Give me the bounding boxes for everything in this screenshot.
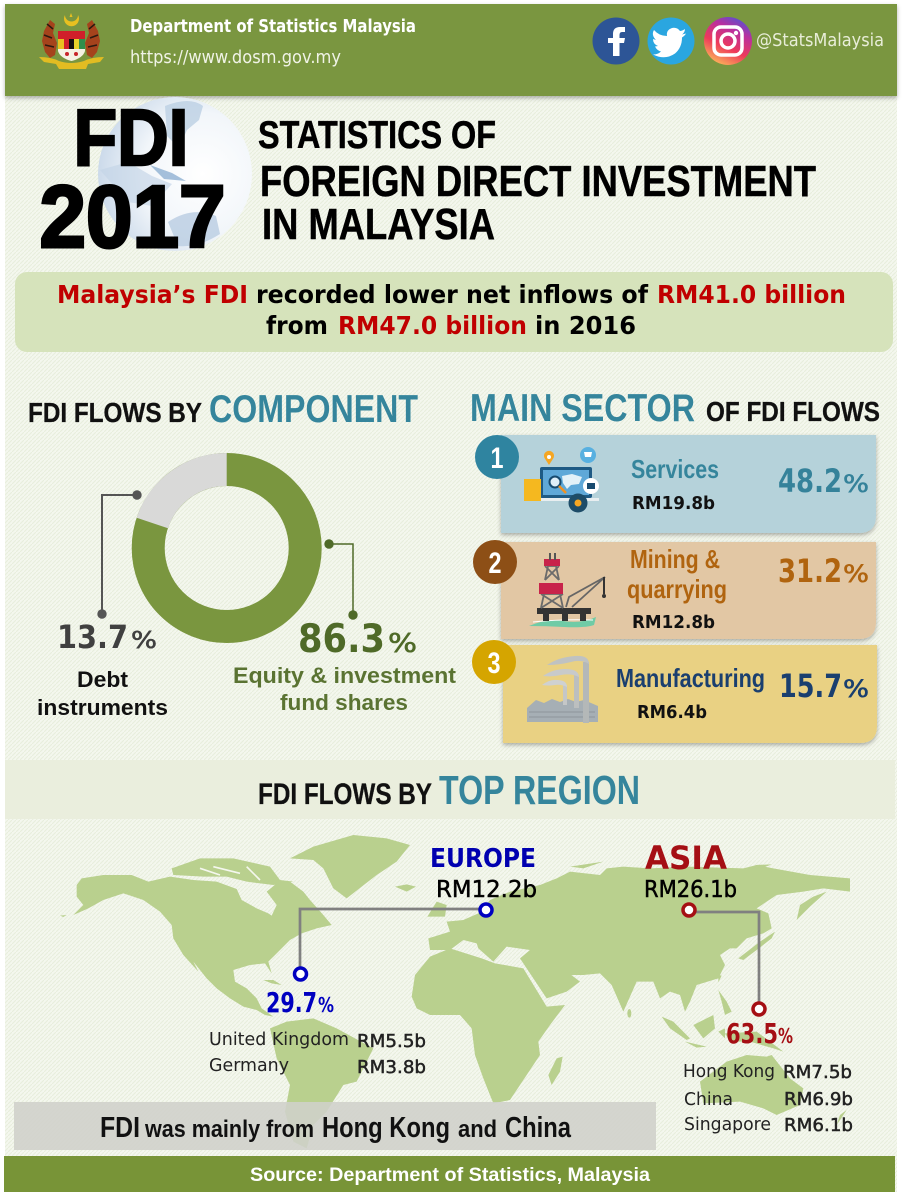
- leader line: debt: [102, 495, 137, 612]
- marker: Americas dot: [294, 968, 306, 980]
- heading band: top region: [5, 760, 895, 819]
- icon: factory: [527, 656, 598, 723]
- value: mining: RM12.8b: [632, 612, 715, 633]
- header department name: Department of Statistics Malaysia: [130, 16, 416, 37]
- icon: instagram: [704, 17, 752, 65]
- percent: services: %: [843, 470, 869, 498]
- debt label: Debt: [77, 667, 129, 692]
- rank badge 1: 1: [490, 442, 504, 475]
- connector: Asia: [694, 912, 759, 1003]
- equity label: Equity & investment: [233, 663, 457, 688]
- value: Europe: RM12.2b: [436, 877, 537, 903]
- icon: oil rig: [529, 553, 606, 627]
- list: Asia countries: RM6.1b: [784, 1115, 853, 1136]
- list: Europe countries: Germany: [209, 1055, 289, 1076]
- list: Asia countries: RM6.9b: [784, 1089, 853, 1110]
- heading band: top region: TOP REGION: [439, 767, 640, 813]
- list: Europe countries: [209, 1029, 426, 1078]
- percent: manufacturing: 15.7: [779, 667, 842, 705]
- debt percentage: 13.7: [57, 618, 128, 656]
- heading: main sector: [470, 387, 880, 430]
- title block: [40, 93, 816, 266]
- heading band: top region: FDI FLOWS BY: [258, 778, 432, 811]
- debt label: [37, 667, 168, 720]
- label: mining: quarrying: [627, 574, 727, 604]
- label: manufacturing: Manufacturing: [616, 663, 765, 693]
- footer: source: [4, 1156, 895, 1192]
- callout: FDI mainly from Hong Kong and China: was mainly from: [144, 1116, 314, 1143]
- card: services: [475, 435, 876, 533]
- title: statistics of: STATISTICS OF: [258, 114, 496, 157]
- callout: net inflows banner: RM47.0 billion: [338, 311, 527, 340]
- list: Asia countries: [683, 1061, 853, 1136]
- list: Asia countries: RM7.5b: [783, 1062, 852, 1083]
- debt percentage: %: [131, 628, 157, 654]
- percent: mining: 31.2: [778, 552, 842, 590]
- callout: FDI mainly from Hong Kong and China: and: [458, 1116, 497, 1143]
- debt label: instruments: [37, 695, 168, 720]
- icon: facebook: [592, 18, 640, 64]
- heading: main sector: MAIN SECTOR: [470, 387, 695, 430]
- callout: net inflows banner: from: [266, 311, 328, 340]
- title: 2017: 2017: [40, 167, 226, 266]
- value: Asia: RM26.1b: [644, 877, 737, 903]
- icon: Malaysia coat of arms: [39, 13, 104, 69]
- list: Europe countries: RM3.8b: [357, 1057, 426, 1078]
- heading: main sector: OF FDI FLOWS: [706, 396, 880, 427]
- rank badge 3: [472, 640, 516, 684]
- marker: Asia dot: [683, 904, 695, 916]
- marker: Southeast Asia dot: [753, 1003, 765, 1015]
- header bar: [5, 4, 897, 96]
- callout: FDI mainly from Hong Kong and China: FDI: [100, 1112, 140, 1144]
- callout: net inflows banner: Malaysia’s FDI: [57, 280, 248, 309]
- label: Asia: ASIA: [645, 839, 727, 877]
- panel: FDI flows by component: [28, 388, 457, 720]
- rank badge 2: 2: [488, 547, 502, 580]
- card: mining and quarrying: [473, 540, 876, 639]
- title: FDI: FDI: [74, 93, 188, 182]
- label: Europe: EUROPE: [430, 844, 536, 874]
- header social handle: @StatsMalaysia: [756, 30, 884, 51]
- leader dots: equity: [324, 539, 358, 620]
- label: mining: Mining &: [630, 544, 720, 574]
- percent: mining: %: [843, 560, 869, 588]
- equity percentage: 86.3: [298, 617, 385, 662]
- rank badge 1: [475, 435, 519, 479]
- donut chart: [148, 470, 305, 626]
- icon: globe: [98, 97, 252, 251]
- percent: Asia: 63.5: [726, 1017, 778, 1050]
- percent: Asia: %: [778, 1024, 793, 1048]
- callout: net inflows banner: in 2016: [535, 311, 636, 340]
- callout: net inflows banner: RM41.0 billion: [657, 280, 846, 309]
- callout: net inflows banner: [15, 272, 893, 352]
- label: mining: [627, 544, 727, 604]
- percent: Europe: 29.7: [266, 986, 317, 1019]
- list: Asia countries: China: [684, 1089, 733, 1110]
- list: Europe countries: United Kingdom: [209, 1029, 349, 1050]
- footer: source: Source: Department of Statistics, Malaysia: [250, 1165, 650, 1186]
- callout: FDI mainly from Hong Kong and China: Hong Kong: [322, 1112, 450, 1144]
- list: Europe countries: RM5.5b: [357, 1031, 426, 1052]
- callout: FDI mainly from Hong Kong and China: [14, 1102, 656, 1150]
- value: services: RM19.8b: [632, 493, 715, 514]
- callout: net inflows banner: recorded lower net inflows of: [256, 280, 649, 309]
- value: manufacturing: RM6.4b: [637, 702, 707, 723]
- percent: services: 48.2: [778, 462, 842, 500]
- marker: Europe dot: [480, 904, 492, 916]
- leader line: equity: [329, 544, 353, 613]
- heading: component: COMPONENT: [209, 388, 418, 431]
- equity percentage: %: [388, 629, 417, 659]
- connector: Europe: [300, 909, 480, 970]
- world map: [60, 835, 850, 1148]
- list: Asia countries: Singapore: [684, 1114, 771, 1135]
- heading: component: FDI FLOWS BY: [28, 397, 202, 428]
- rank badge 2: [473, 540, 517, 584]
- icon: twitter: [648, 18, 694, 64]
- equity label: [233, 663, 457, 715]
- header website: https://www.dosm.gov.my: [130, 47, 341, 68]
- percent: Europe: %: [318, 993, 334, 1017]
- icon: digital services: [524, 447, 599, 512]
- rank badge 3: 3: [488, 647, 500, 680]
- panel: top region: [5, 760, 895, 1150]
- list: Asia countries: Hong Kong: [683, 1061, 775, 1082]
- card: manufacturing: [472, 640, 877, 743]
- leader dots: debt: [97, 490, 142, 619]
- equity label: fund shares: [280, 690, 408, 715]
- heading: component: [28, 388, 418, 431]
- panel: main sector: [470, 387, 880, 743]
- callout: FDI mainly from Hong Kong and China: China: [505, 1112, 572, 1144]
- title: in malaysia: IN MALAYSIA: [262, 200, 495, 249]
- label: services: Services: [631, 454, 719, 484]
- percent: manufacturing: %: [843, 675, 869, 703]
